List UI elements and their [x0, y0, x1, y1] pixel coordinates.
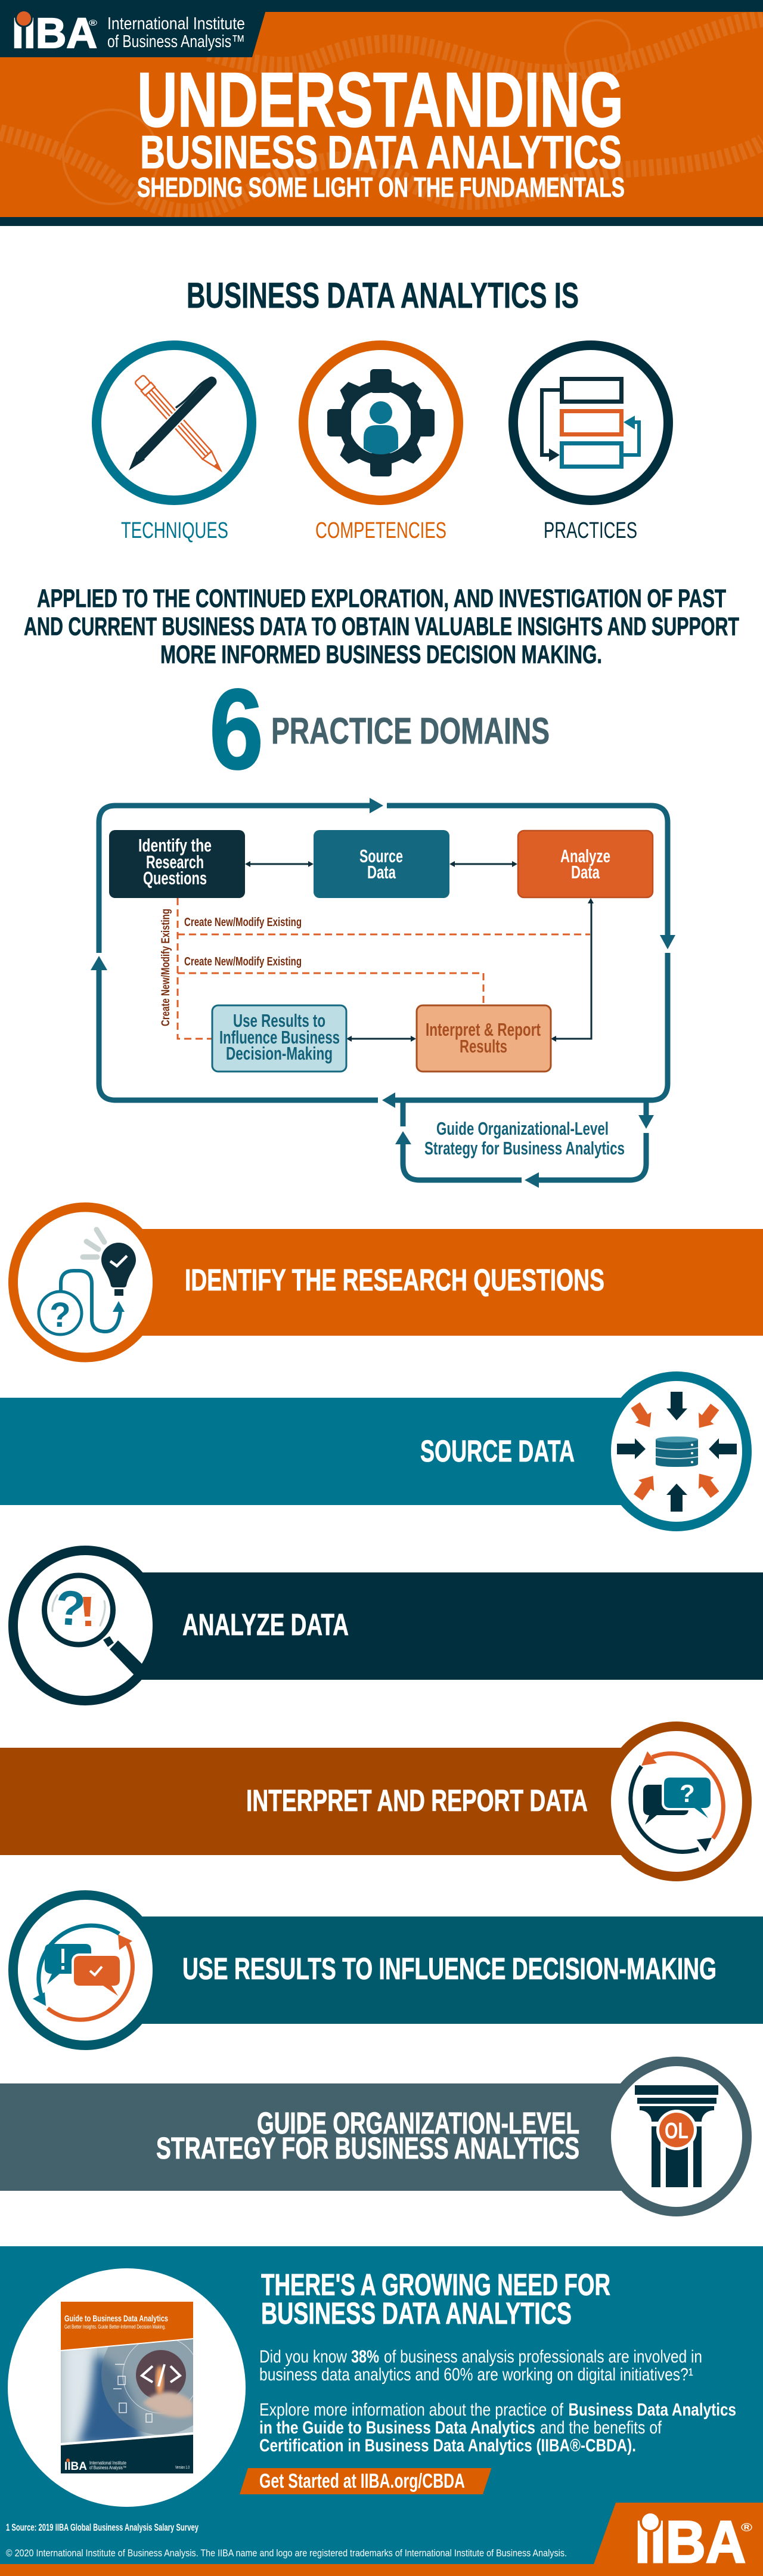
- box: identify the research questions: Identify the: [138, 835, 212, 856]
- text block: explore more: Certification in Business Data Analytics (IIBA®-CBDA).: [259, 2436, 636, 2456]
- panel: source data: [0, 1376, 747, 1527]
- box: use results: [212, 1005, 346, 1072]
- label: practices: PRACTICES: [544, 518, 637, 543]
- panel: analyze data: [13, 1550, 763, 1701]
- footer logo block: IIBA: [635, 2509, 746, 2575]
- banner heading: SOURCE DATA: [420, 1434, 575, 1468]
- arrow: outer loop: [91, 798, 675, 1108]
- icon: magnifying glass: [44, 1575, 145, 1677]
- icon: techniques circle with pen and pencil: [97, 345, 252, 500]
- icon: person: [364, 401, 398, 454]
- icon: pen: [129, 379, 212, 470]
- book photo: [61, 2339, 193, 2443]
- dashed feedback connectors: [178, 898, 590, 1039]
- book cover in white circle: Get Better Insights. Guide Better-Informed Decision Making.: [64, 2324, 166, 2330]
- copyright: © 2020 International Institute of Business Analysis. The IIBA name and logo are registered trademarks of International Institute of Business Analysis.: [6, 2547, 567, 2559]
- panel: header banner: [0, 0, 763, 226]
- text block: statistics: Did you know: [259, 2347, 347, 2367]
- heading: 6 practice domains: [209, 665, 550, 793]
- footer heading: [261, 2268, 610, 2330]
- icon: decision cycle with speech bubbles: [33, 1925, 132, 2020]
- footer heading: THERE'S A GROWING NEED FOR: [261, 2268, 610, 2302]
- heading: business data analytics is: BUSINESS DATA ANALYTICS IS: [187, 275, 579, 315]
- box: interpret and report results: [417, 1005, 551, 1072]
- text block: explore more: in the Guide to Business Data Analytics: [259, 2418, 535, 2438]
- box: source data: [314, 830, 449, 898]
- logo block: IIBA: [12, 10, 97, 57]
- book cover in white circle: [8, 2268, 246, 2507]
- button: get started: [240, 2468, 491, 2494]
- arrow: strategy sub-loop: [395, 1100, 654, 1188]
- box: analyze data: [518, 831, 653, 897]
- book cover in white circle: of Business Analysis™: [89, 2465, 126, 2470]
- icon: magnifying glass: ?: [54, 1580, 87, 1637]
- box: source data: Data: [367, 862, 396, 883]
- text block: explore more: and the benefits of: [540, 2418, 662, 2438]
- book cover in white circle: Guide to Business Data Analytics: [64, 2314, 168, 2324]
- logo block: of Business Analysis™: [107, 32, 245, 51]
- labels: create new or modify existing: Create New/Modify Existing: [160, 909, 172, 1026]
- logo block: [0, 0, 269, 57]
- icon: pencil: [134, 374, 225, 475]
- box: interpret and report results: Results: [460, 1036, 507, 1057]
- source note: 1 Source: 2019 IIBA Global Business Analysis Salary Survey: [6, 2522, 198, 2533]
- decorative wave background: [0, 18, 763, 212]
- book cover in white circle: International Institute: [89, 2460, 126, 2466]
- banner heading: ANALYZE DATA: [182, 1608, 349, 1642]
- text block: definition paragraph: [24, 584, 739, 669]
- footer heading: BUSINESS DATA ANALYTICS: [261, 2296, 572, 2330]
- panel: use results to influence decision-making: [13, 1895, 763, 2045]
- icon: light bulb and question: [39, 1230, 136, 1335]
- box: interpret and report results: Interpret & Report: [426, 1019, 541, 1040]
- text block: definition paragraph: MORE INFORMED BUSINESS DECISION MAKING.: [160, 640, 602, 669]
- text block: statistics: 38%: [351, 2347, 379, 2367]
- text block: statistics: [259, 2347, 702, 2385]
- icon: report cycle with speech bubbles: [631, 1751, 723, 1852]
- icon: practices circle with flow boxes: [513, 345, 668, 500]
- logo block: ®: [89, 18, 98, 27]
- icon: pillar with OL badge: [635, 2085, 718, 2187]
- box: analyze data: Analyze: [560, 846, 610, 866]
- label: guide organizational-level strategy: [424, 1118, 625, 1159]
- box: use results: Use Results to: [233, 1010, 325, 1031]
- footer logo block: ®: [741, 2522, 752, 2534]
- icon: light bulb and question: ?: [49, 1296, 71, 1335]
- label: techniques: TECHNIQUES: [121, 518, 228, 543]
- box: use results: Decision-Making: [226, 1043, 333, 1064]
- icon: pillar with OL badge: OL: [665, 2119, 688, 2144]
- heading: 6 practice domains: 6: [209, 665, 263, 793]
- button: get started: Get Started at IIBA.org/CBDA: [259, 2470, 465, 2493]
- logo block: International Institute: [107, 14, 245, 33]
- icon: gear: [327, 369, 435, 476]
- labels: create new or modify existing: Create New/Modify Existing: [184, 916, 302, 929]
- box: identify the research questions: [109, 830, 245, 898]
- box: identify the research questions: Research: [146, 852, 204, 872]
- icon: database with converging arrows: [617, 1392, 737, 1512]
- text block: explore more: Explore more information about the practice of: [259, 2400, 564, 2420]
- box: identify the research questions: Questions: [143, 868, 207, 888]
- banner heading: IDENTIFY THE RESEARCH QUESTIONS: [185, 1263, 604, 1297]
- panel: footer call to action: [0, 2246, 763, 2576]
- banner heading: [156, 2106, 579, 2165]
- label: guide organizational-level strategy: Strategy for Business Analytics: [424, 1138, 625, 1159]
- banner heading: GUIDE ORGANIZATION-LEVEL: [257, 2106, 579, 2140]
- label: guide organizational-level strategy: Guide Organizational-Level: [436, 1118, 609, 1139]
- panel: interpret and report data: [0, 1726, 747, 1877]
- heading: 6 practice domains: PRACTICE DOMAINS: [271, 711, 550, 752]
- icon: competencies circle with gear and person: [303, 345, 458, 500]
- banner heading: INTERPRET AND REPORT DATA: [246, 1784, 588, 1818]
- labels: create new or modify existing: Create New/Modify Existing: [184, 955, 302, 968]
- box: source data: Source: [359, 846, 403, 866]
- panel: guide organization-level strategy: [0, 2061, 747, 2212]
- footer logo block: [0, 2503, 763, 2576]
- panel: identify the research questions: [13, 1207, 763, 1357]
- book cover in white circle: Version 1.0: [175, 2466, 190, 2470]
- book cover in white circle: IIBA: [64, 2460, 87, 2473]
- box: use results: Influence Business: [219, 1027, 340, 1048]
- chart: practice domains flow diagram: [91, 798, 675, 1188]
- label: competencies: COMPETENCIES: [315, 518, 446, 543]
- title: [137, 56, 625, 203]
- arrow: solid dark connectors: [245, 861, 594, 1042]
- banner heading: STRATEGY FOR BUSINESS ANALYTICS: [156, 2131, 579, 2165]
- box: analyze data: Data: [571, 862, 600, 883]
- text block: explore more: [259, 2400, 736, 2456]
- labels: create new or modify existing: [160, 909, 302, 1026]
- text block: statistics: of business analysis professionals are involved in: [384, 2347, 702, 2367]
- icon: report cycle with speech bubbles: ?: [680, 1779, 695, 1807]
